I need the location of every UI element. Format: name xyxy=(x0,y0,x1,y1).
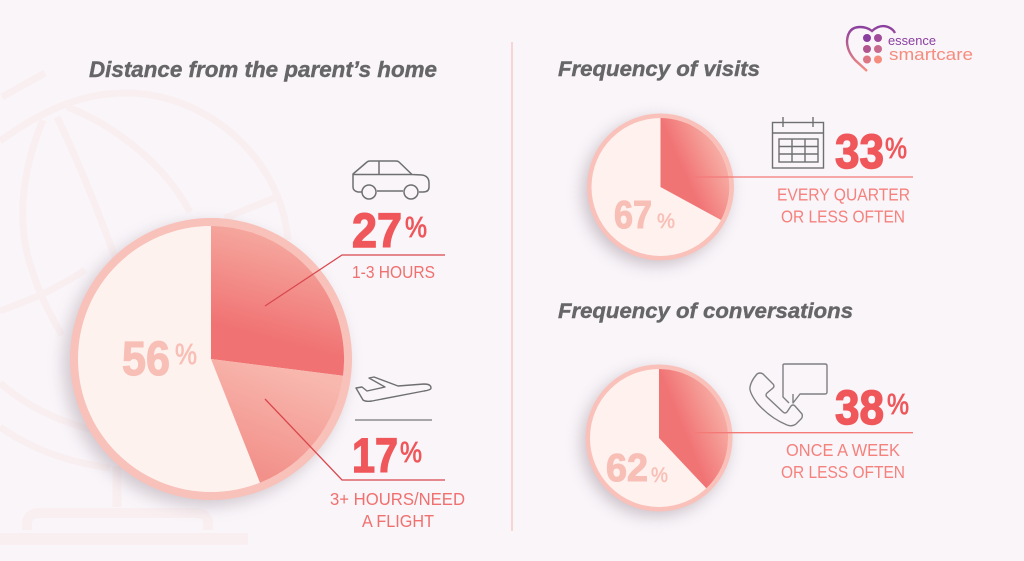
stat: 27%: 27 xyxy=(352,205,402,258)
label: 1-3 hours: 1-3 HOURS xyxy=(352,262,435,282)
label: every quarter xyxy=(777,184,910,226)
label: once a week xyxy=(781,440,905,482)
leader line: 33% xyxy=(695,176,913,178)
heading: conversations: Frequency of conversations xyxy=(558,300,853,323)
label: 3+ hours: 3+ HOURS/NEED xyxy=(330,489,465,509)
leader line: 38% xyxy=(695,432,913,434)
label: every quarter: OR LESS OFTEN xyxy=(781,206,905,226)
icon: phone and speech bubble xyxy=(750,364,827,426)
stat: 17%: % xyxy=(400,437,422,469)
stat: 33%: 33 xyxy=(835,126,884,179)
label: 62%: % xyxy=(651,464,668,487)
leader line: 17% xyxy=(265,399,445,480)
label: 62%: 62 xyxy=(606,447,648,490)
label: 56%: % xyxy=(175,339,197,371)
stat: 33%: % xyxy=(885,133,907,165)
label: 67%: 67 xyxy=(614,194,652,237)
icon: plane xyxy=(356,377,431,401)
label: 62% xyxy=(606,447,668,490)
logo: smartcare xyxy=(889,45,973,64)
stat: 38%: % xyxy=(887,389,909,421)
divider xyxy=(511,42,513,531)
label: once a week: OR LESS OFTEN xyxy=(781,462,905,482)
pie chart: distance xyxy=(64,218,352,506)
pie chart: visits xyxy=(583,114,734,265)
label: every quarter: EVERY QUARTER xyxy=(777,184,910,204)
stat: 27%: % xyxy=(405,212,427,244)
heading: distance: Distance from the parent’s home xyxy=(89,57,437,82)
label: 3+ hours xyxy=(330,489,465,531)
plane divider xyxy=(355,419,432,421)
logo dots xyxy=(863,34,882,64)
logo text: essence xyxy=(888,33,936,48)
logo xyxy=(847,26,973,71)
heading: visits: Frequency of visits xyxy=(558,58,760,81)
globe watermark xyxy=(0,73,288,545)
pie chart: conversations xyxy=(582,364,732,516)
leader line: 27% xyxy=(265,255,445,306)
stat: 17%: 17 xyxy=(352,430,398,483)
label: once a week: ONCE A WEEK xyxy=(786,440,900,460)
label: 56%: 56 xyxy=(122,333,170,386)
icon: car xyxy=(353,161,429,199)
label: 67%: % xyxy=(657,210,675,233)
icon: calendar xyxy=(772,117,824,168)
stat: 38%: 38 xyxy=(835,382,884,435)
logo heart xyxy=(847,26,895,71)
label: 3+ hours: A FLIGHT xyxy=(362,511,434,531)
